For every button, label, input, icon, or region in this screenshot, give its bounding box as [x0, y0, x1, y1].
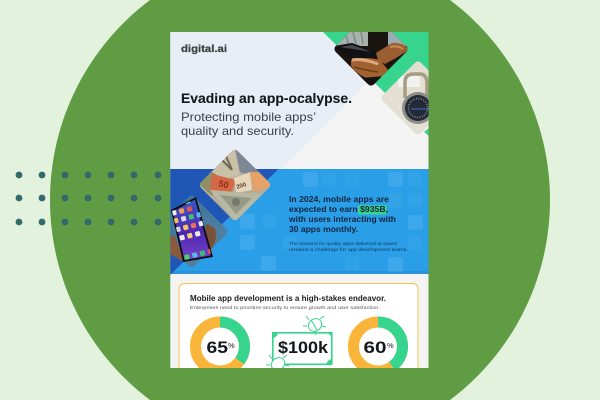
icon: bug top	[303, 316, 326, 335]
bill: $100k: $100k	[278, 339, 329, 357]
stat headline: In 2024, mobile apps are	[289, 194, 389, 204]
stat headline: with users interacting with	[288, 214, 396, 224]
logo: digital.ai	[181, 43, 227, 55]
card heading: Mobile app development is a high-stakes endeavor.	[190, 294, 386, 303]
panel: high-stakes card	[178, 283, 418, 368]
photo: hand holding phone	[334, 32, 408, 86]
stat headline: expected to earn $935B,	[289, 204, 388, 214]
donut: 60%: %	[387, 341, 394, 350]
panel: header	[170, 32, 428, 170]
donut: 65%	[196, 322, 244, 371]
photo: banknotes	[200, 150, 270, 220]
stat headline: 30 apps monthly.	[289, 224, 358, 234]
donut: 65%: %	[228, 341, 235, 350]
photo: banknotes: 50	[218, 178, 230, 190]
icon: bug bottom	[266, 354, 290, 368]
card subheading: Enterprises need to prioritize security to ensure growth and user satisfaction.	[190, 305, 380, 311]
faint app icons	[240, 172, 423, 272]
title: Evading an app-ocalypse.	[181, 90, 352, 106]
photo: padlock	[382, 62, 428, 134]
highlight: $935B	[358, 205, 387, 214]
bill: $100k	[272, 332, 332, 365]
donut: 60%	[354, 322, 402, 371]
photo: smartphone in hand	[170, 196, 228, 268]
photo: banknotes: 200	[236, 182, 248, 191]
stat body text: The demand for quality apps delivered at speed	[289, 241, 397, 247]
panel: blue stats band	[170, 150, 428, 275]
donut: 60%: 60	[364, 339, 386, 357]
subtitle: quality and security.	[181, 124, 294, 138]
stat body text: remains a challenge for app development teams.	[289, 247, 408, 253]
infographic page	[170, 32, 428, 368]
subtitle: Protecting mobile apps’	[181, 110, 316, 124]
donut: 65%: 65	[206, 339, 228, 357]
dot grid	[16, 172, 161, 225]
